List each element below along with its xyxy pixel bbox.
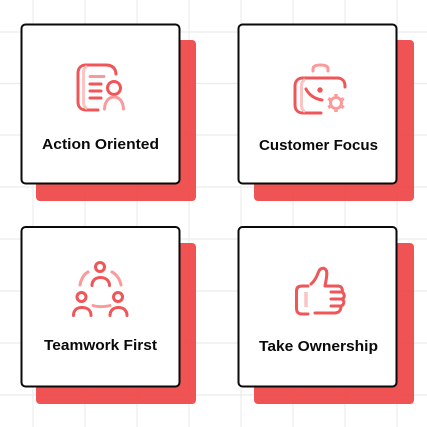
icon: thumbs up <box>296 268 344 314</box>
panel: customer focus <box>238 24 396 184</box>
shadow panel: teamwork first <box>36 243 196 404</box>
heading: teamwork first: Teamwork First <box>44 338 157 354</box>
shadow panel: action oriented <box>36 40 196 201</box>
icon: three people <box>74 262 127 316</box>
panel: teamwork first <box>22 227 180 386</box>
icon: briefcase with gear <box>295 65 345 113</box>
icon: document with person <box>78 65 124 110</box>
heading: action oriented: Action Oriented <box>42 137 159 153</box>
heading: customer focus: Customer Focus <box>259 138 378 154</box>
panel: take ownership <box>238 227 396 386</box>
panel: action oriented <box>22 24 180 184</box>
shadow panel: take ownership <box>254 243 414 404</box>
shadow panel: customer focus <box>254 40 414 201</box>
heading: take ownership: Take Ownership <box>259 339 378 355</box>
